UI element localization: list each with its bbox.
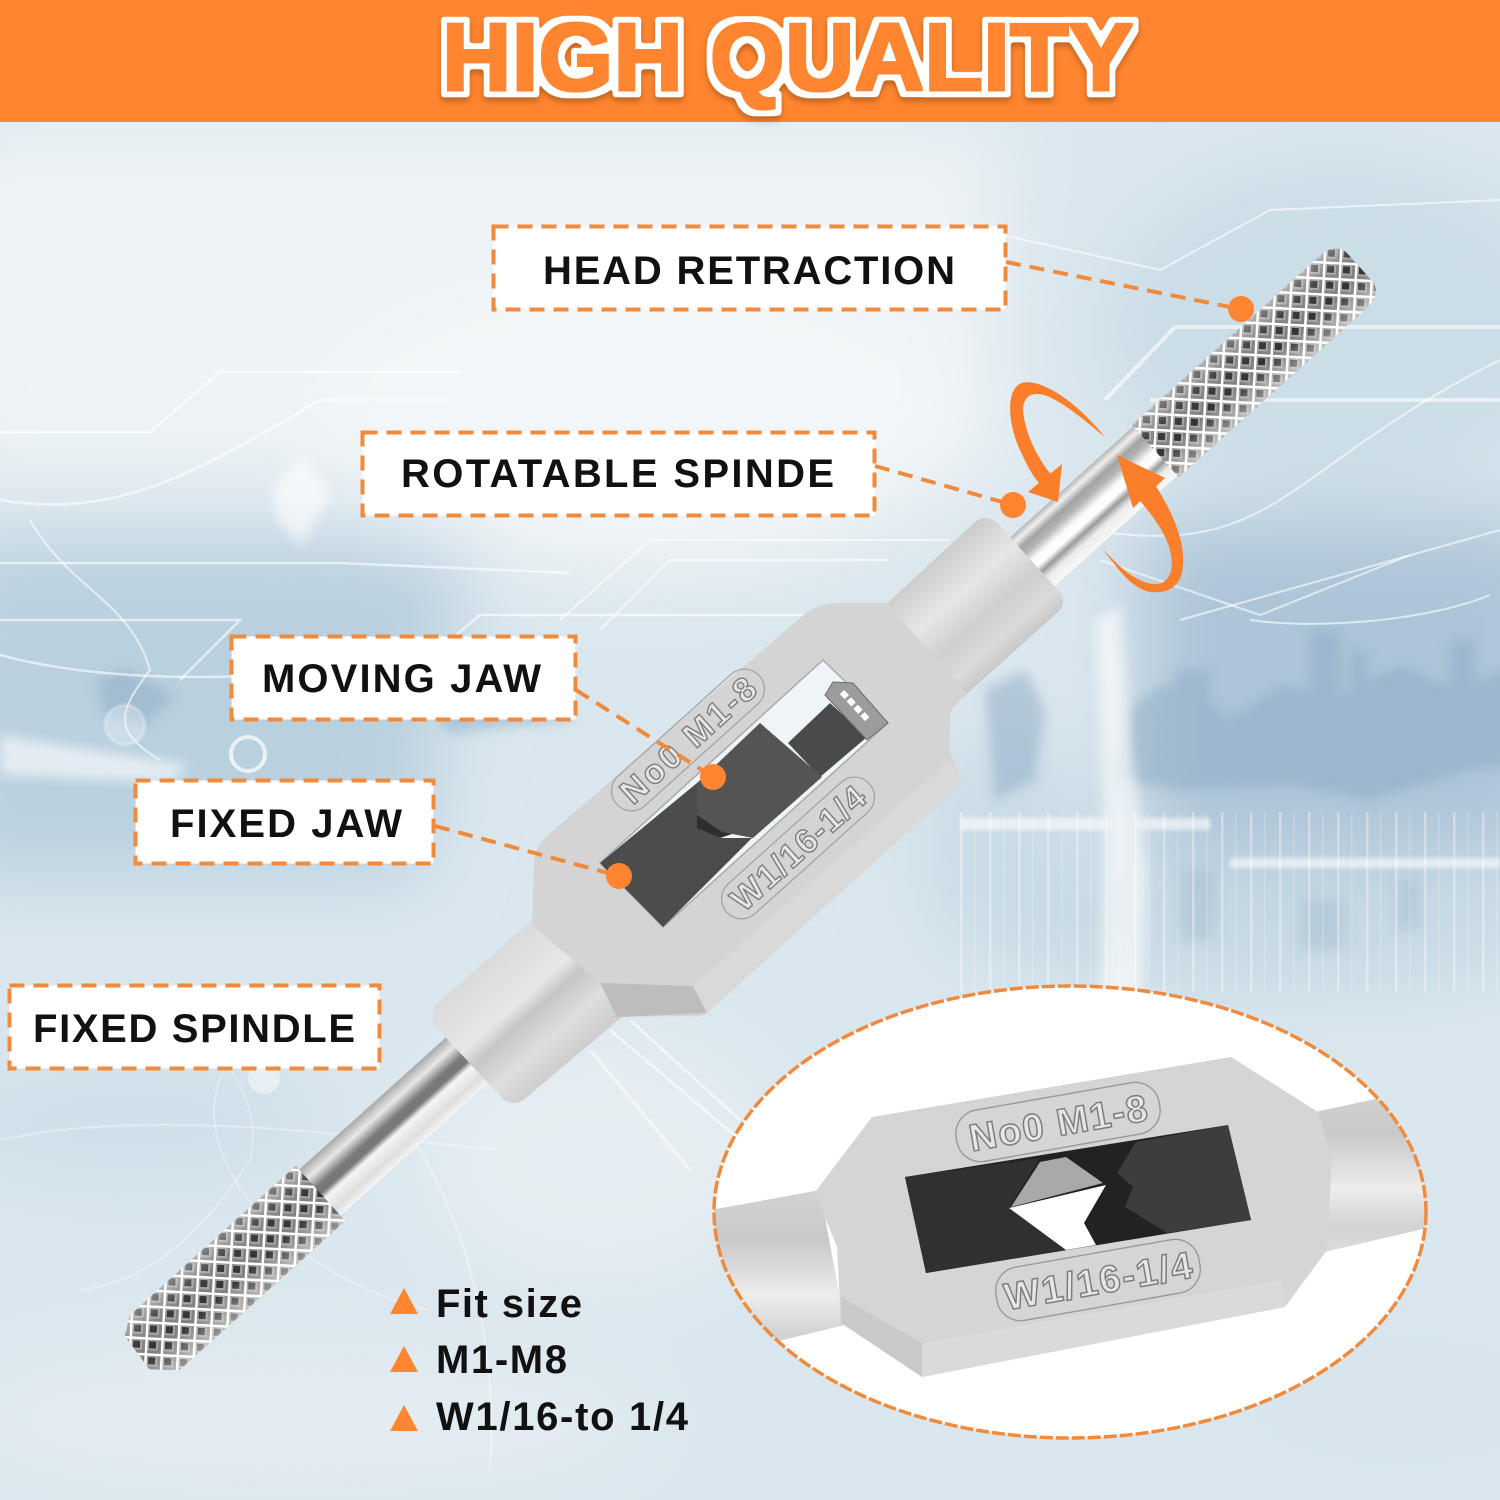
header banner [0,0,1500,122]
callout: fixed jaw [136,780,632,889]
lower spindle and knurled grip [114,1024,503,1385]
inset body lower facet [841,1297,922,1377]
callout: fixed spindle: FIXED SPINDLE [33,1007,355,1051]
inset right handle [1318,1098,1426,1252]
callout: fixed spindle [10,986,380,1068]
inset body bottom strip [931,1312,1261,1376]
callout: head retraction: HEAD RETRACTION [543,249,955,293]
inset plate: W1/16-1/4: W1/16-1/4 [1001,1245,1196,1319]
inset window [905,1125,1251,1273]
inset gray facet [1011,1157,1103,1207]
rotation arrow: upper left [1010,382,1105,502]
callout: moving jaw: MOVING JAW [262,657,541,701]
body lower facet [600,983,707,1017]
tap wrench tool [114,241,1383,1385]
upper spindle and knurled grip [983,241,1383,611]
engraved plate: No0 M1-8: No0 M1-8 [613,670,765,812]
upper sleeve [880,518,1063,700]
jaw gap shadow [697,812,738,838]
window opening [600,660,888,927]
inset left jaw [905,1158,1066,1273]
callout: head retraction [494,226,1254,322]
inset dashed border [714,986,1426,1438]
size item: fit size: Fit size [436,1282,582,1326]
fixed jaw [600,783,752,927]
callout: rotatable spindle: ROTATABLE SPINDE [401,452,834,496]
lower sleeve [432,920,630,1103]
inset body [815,1057,1332,1377]
moving jaw [697,723,822,838]
rotation arrow: lower right [1102,455,1183,592]
size list [390,1282,689,1439]
callout: fixed jaw: FIXED JAW [170,802,402,846]
callout: moving jaw [232,636,726,790]
inset right jaw [1117,1125,1251,1233]
engraved plate: W1/16-1/4: W1/16-1/4 [724,778,874,919]
screw rod [788,703,867,777]
size item: W1/16-to 1/4: W1/16-to 1/4 [436,1395,689,1439]
inset zoom view [700,986,1440,1438]
body lower strip [693,760,962,1013]
title: HIGH QUALITY [442,4,1133,111]
size item: M1-M8: M1-M8 [436,1338,567,1382]
callout: rotatable spindle [362,432,1026,518]
handle body [532,603,966,1017]
screw head [825,682,888,740]
inset plate: No0 M1-8: No0 M1-8 [966,1088,1151,1160]
inset white gap [1009,1185,1106,1250]
inset left handle [714,1190,844,1340]
